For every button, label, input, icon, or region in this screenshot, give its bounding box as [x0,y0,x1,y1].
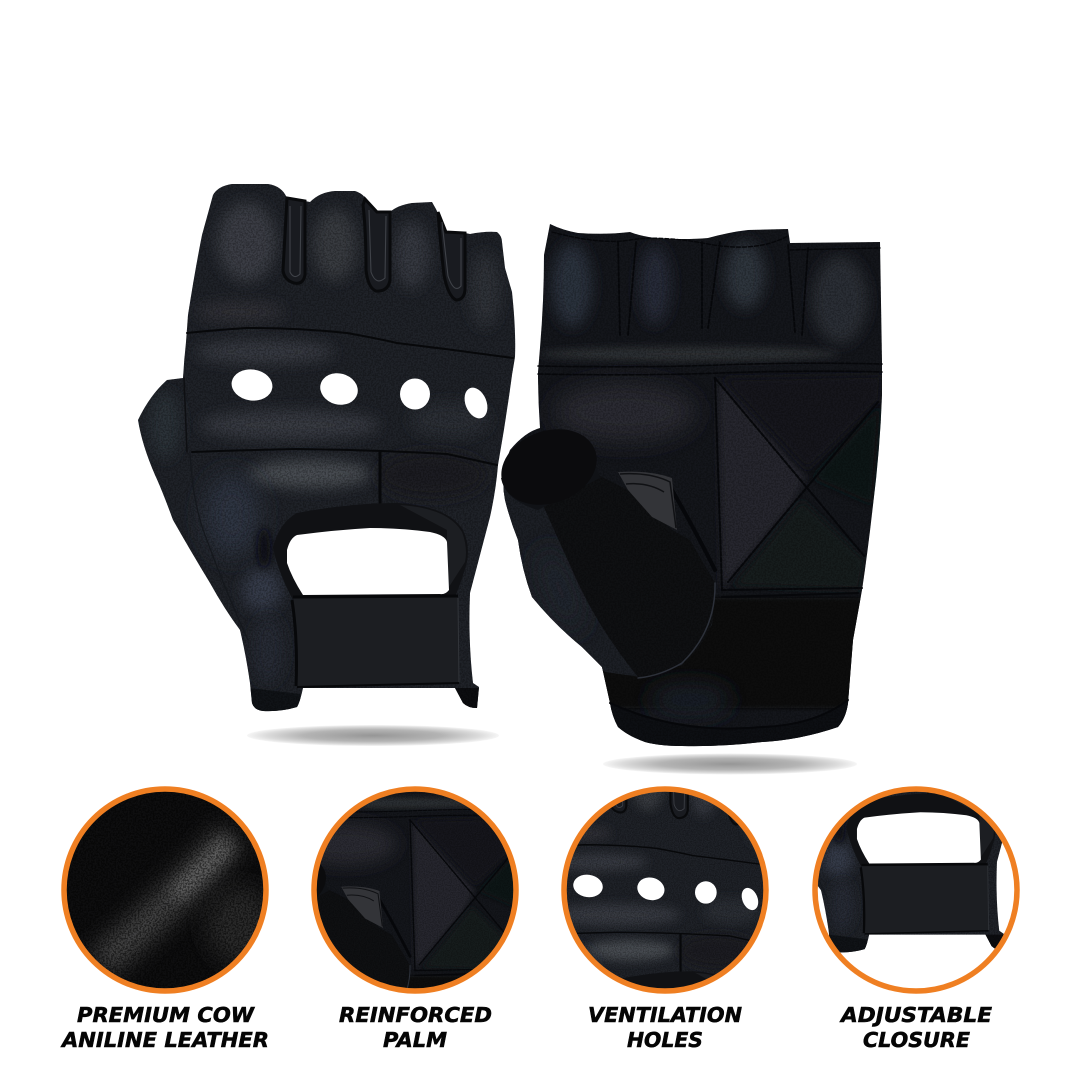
left glove [130,170,530,720]
product infographic [60,184,1020,1048]
feature: reinforced palm [311,786,519,1048]
right glove [490,220,900,760]
feature: premium cow aniline leather [60,785,274,1052]
palm close-up [316,792,514,988]
feature: ventilation holes: HOLES [627,1028,703,1052]
feature: adjustable closure: CLOSURE [863,1028,970,1052]
feature: reinforced palm: REINFORCED [339,1003,492,1027]
feature: reinforced palm: PALM [383,1028,447,1052]
feature: adjustable closure [812,786,1020,1048]
closure close-up [818,792,1004,952]
holes close-up [566,792,764,988]
shadow under right glove [603,754,857,774]
feature: premium cow aniline leather: PREMIUM COW [77,1003,255,1027]
feature: ventilation holes: VENTILATION [588,1003,742,1027]
feature: ventilation holes [561,786,769,1048]
shadow under left glove [247,725,499,746]
feature: premium cow aniline leather: ANILINE LEATHER [60,1028,269,1052]
feature: adjustable closure: ADJUSTABLE [839,1003,992,1027]
leather close-up [66,792,264,988]
